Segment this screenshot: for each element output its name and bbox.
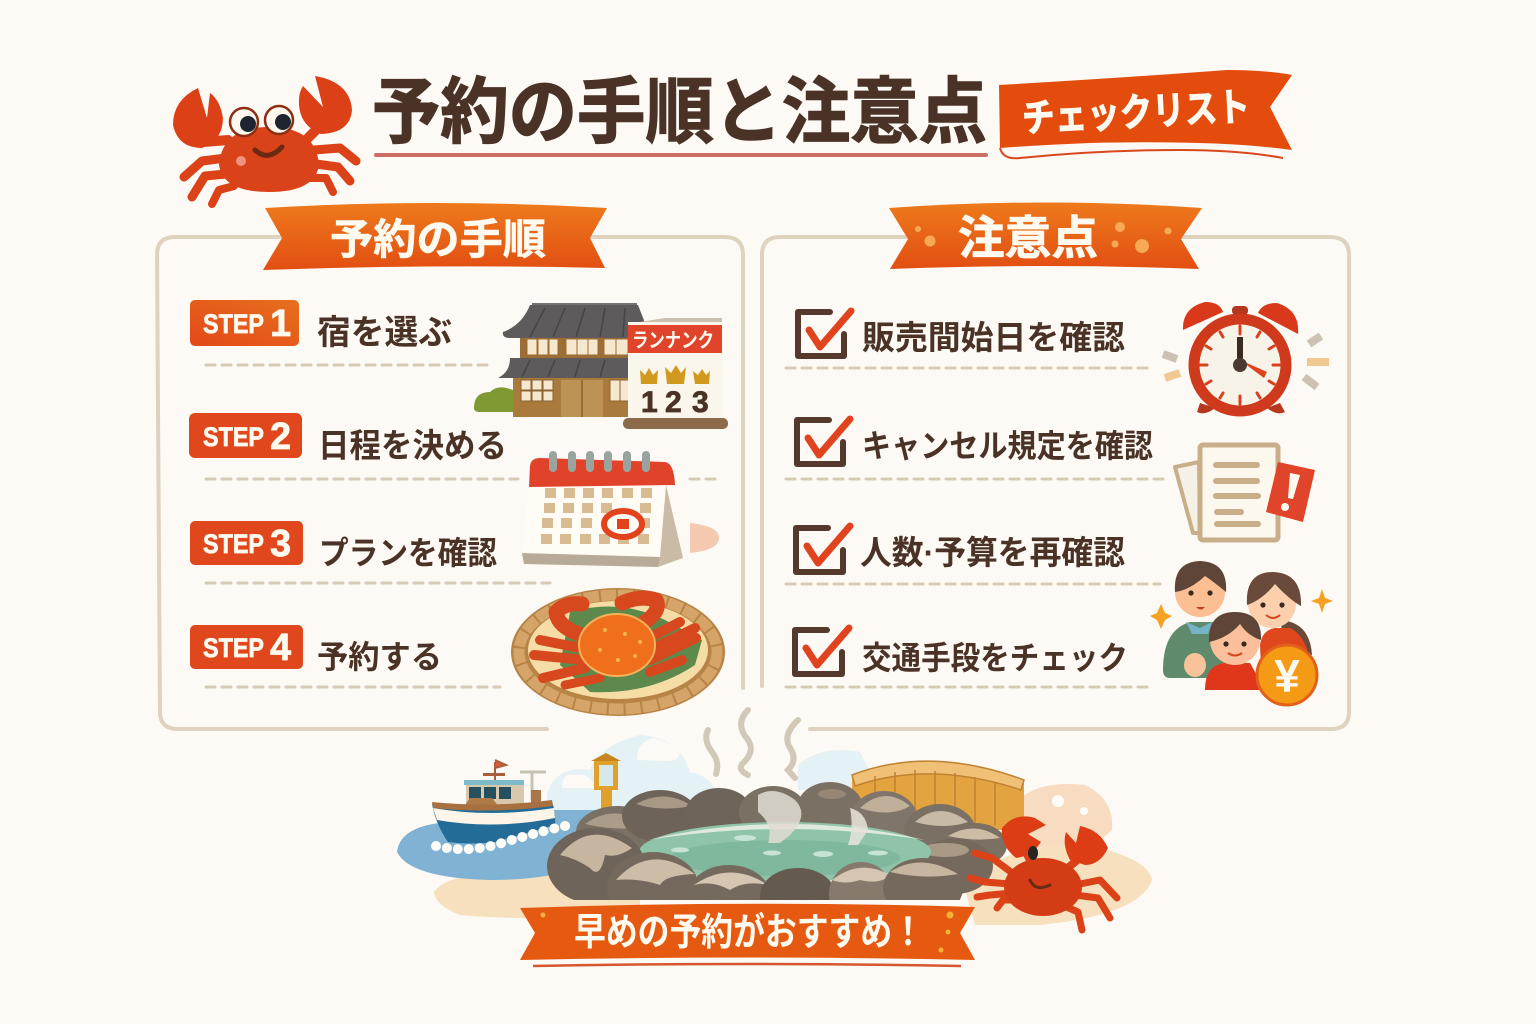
- step 2: [189, 413, 722, 479]
- check item 4: [786, 628, 1150, 687]
- check item 4: 交通手段をチェック: [862, 640, 1128, 676]
- title: 予約の手順と注意点: [372, 73, 987, 153]
- wooden fence: [852, 761, 1024, 830]
- icon: inn with ranking board: [474, 304, 728, 429]
- icon: scene crab: [970, 816, 1117, 930]
- check item 1: [786, 311, 1154, 368]
- icon: inn with ranking board: 3: [692, 386, 709, 419]
- icon: inn with ranking board: ランナンク: [632, 329, 714, 352]
- step 4: 4: [270, 627, 291, 669]
- icon: lantern: [591, 753, 621, 812]
- step 1: 1: [270, 303, 291, 345]
- step 2: STEP: [203, 422, 264, 452]
- icon: crab on a plate: [511, 588, 725, 716]
- check item 3: [786, 526, 1160, 584]
- steam wisps: [706, 710, 798, 778]
- rock pool: [547, 782, 1007, 900]
- panel: cautions: [762, 202, 1349, 729]
- step 3: STEP: [203, 529, 264, 559]
- heading ribbon: steps: 予約の手順: [330, 216, 546, 263]
- step 2: 2: [270, 416, 291, 458]
- icon: fishing boat: [432, 760, 574, 849]
- banner: book early: 早めの予約がおすすめ！: [574, 912, 924, 954]
- step 1: [190, 300, 487, 365]
- ribbon: checklist: チェックリスト: [1021, 86, 1251, 141]
- sea: [397, 810, 596, 880]
- check item 1: 販売間始日を確認: [862, 319, 1125, 356]
- step 4: 予約する: [317, 639, 442, 675]
- icon: mascot crab: [173, 76, 356, 204]
- step 3: [190, 521, 550, 583]
- icon: calendar: [522, 451, 719, 567]
- icon: documents with alert: [1175, 445, 1315, 540]
- step 3: プランを確認: [319, 535, 497, 571]
- sand and sky backdrop: [434, 735, 1152, 925]
- step 1: 宿を選ぶ: [317, 314, 452, 352]
- heading ribbon: steps: [263, 203, 607, 270]
- illustration: hot spring scene: [397, 710, 1152, 966]
- check item 3: 人数·予算を再確認: [860, 534, 1125, 571]
- banner: book early: [520, 904, 975, 966]
- step 3: 3: [270, 523, 291, 565]
- step 1: STEP: [203, 309, 264, 339]
- heading ribbon: cautions: [889, 202, 1202, 269]
- step 2: 日程を決める: [318, 427, 507, 464]
- icon: family with yen coin: ¥: [1274, 650, 1300, 702]
- step 4: [190, 625, 500, 687]
- check item 2: [786, 419, 1165, 479]
- icon: inn with ranking board: 2: [665, 386, 682, 419]
- icon: inn with ranking board: 1: [641, 386, 658, 419]
- icon: family with yen coin: [1150, 561, 1333, 705]
- check item 2: キャンセル規定を確認: [862, 428, 1153, 464]
- heading ribbon: cautions: 注意点: [958, 212, 1098, 264]
- step 4: STEP: [203, 633, 264, 663]
- ribbon: checklist: [999, 70, 1292, 158]
- panel: reservation steps: [157, 203, 743, 729]
- icon: alarm clock: [1163, 302, 1329, 413]
